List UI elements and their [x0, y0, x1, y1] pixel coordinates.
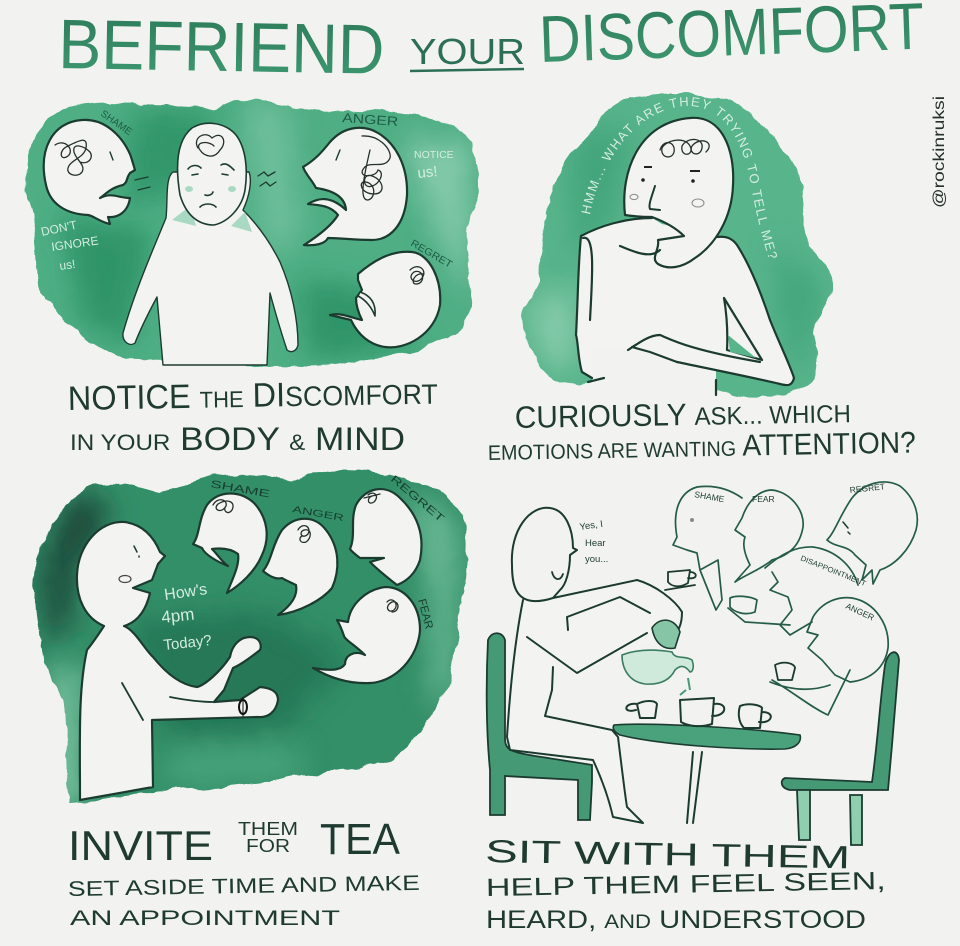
emotion bubble: shame: DON'T [40, 218, 79, 239]
emotion: disappointment: DISAPPOINTMENT [799, 554, 868, 588]
panel: invite them for tea [20, 460, 480, 810]
emotion: regret [827, 481, 917, 584]
emotion bubble: shame [193, 478, 271, 593]
emotion bubble: shame: IGNORE [50, 234, 99, 254]
teapot [622, 620, 693, 684]
panel: sit with them [487, 481, 917, 845]
emotion bubble: anger: NOTICE [414, 149, 454, 161]
credit handle: @rockinruksi [931, 96, 948, 208]
emotion bubble: regret [350, 473, 447, 585]
caption: invite them for tea: INVITE [68, 822, 213, 869]
person and watch: Today? [163, 632, 213, 654]
emotion bubble: shame: SHAME [98, 108, 134, 138]
emotion bubble: anger [303, 110, 454, 245]
caption: invite them for tea: FOR [246, 836, 290, 856]
caption: notice the discomfort: IN YOUR BODY & MIND [70, 421, 405, 457]
emotion bubble: regret [330, 238, 454, 347]
curved thought text: HMM... WHAT ARE THEY TRYING TO TELL ME? [581, 97, 777, 258]
left chair [487, 633, 592, 820]
emotion bubble: shame [40, 108, 135, 273]
emotion group: shame and fear: FEAR [752, 494, 775, 504]
caption: invite them for tea: THEM [238, 819, 298, 839]
emotion: anger: ANGER [844, 601, 876, 623]
pouring person: Hear [585, 538, 606, 549]
panel: curiously ask [521, 92, 834, 398]
watercolor wash 1 [24, 98, 479, 368]
watercolor wash 3 [20, 460, 480, 810]
caption: sit with them: HEARD, AND UNDERSTOOD [486, 906, 866, 934]
person and watch [77, 522, 278, 800]
pouring person [507, 508, 682, 823]
panel: notice the discomfort [24, 98, 479, 368]
caption: sit with them [485, 833, 886, 934]
emotion bubble: anger: ANGER [291, 504, 345, 524]
person and watch: How's [163, 581, 208, 604]
caption: sit with them: SIT WITH THEM [485, 833, 850, 875]
emotion bubble: anger: ANGER [342, 110, 399, 129]
person with hands on ears [123, 123, 298, 365]
emotion bubble: fear: FEAR [415, 598, 435, 630]
title: BEFRIEND [58, 5, 385, 89]
caption: curiously ask: EMOTIONS ARE WANTING ATTENTION? [488, 427, 916, 467]
emotion bubble: fear [313, 587, 435, 683]
caption: sit with them: HELP THEM FEEL SEEN, [486, 867, 886, 902]
caption: invite them for tea: TEA [320, 815, 401, 864]
emotion bubble: shame: SHAME [209, 478, 271, 500]
caption: curiously ask [488, 394, 916, 467]
emotion group: shame and fear: SHAME [694, 489, 725, 504]
emotion: regret: REGRET [849, 481, 885, 495]
caption: curiously ask: CURIOUSLY ASK... WHICH [515, 394, 851, 435]
emotion group: shame and fear [665, 486, 803, 610]
emotion bubble: anger [263, 504, 345, 615]
pouring person: you... [585, 554, 608, 565]
emotion bubble: anger: us! [417, 163, 438, 182]
emotion: anger [770, 598, 888, 715]
emotion bubble: regret: REGRET [408, 238, 454, 271]
person and watch: 4pm [160, 605, 195, 627]
caption: invite them for tea: AN APPOINTMENT [70, 907, 340, 930]
title [58, 0, 925, 89]
right chair [782, 652, 899, 845]
thinking person [576, 118, 794, 402]
emotion: disappointment [728, 547, 868, 635]
emotion bubble: regret: REGRET [388, 473, 447, 525]
watercolor wash 2 [521, 92, 834, 398]
caption: notice the discomfort [67, 374, 438, 457]
title: YOUR [410, 31, 525, 72]
caption: invite them for tea: SET ASIDE TIME AND MAKE [68, 872, 420, 901]
caption: notice the discomfort: NOTICE THE DISCOMFORT [67, 374, 438, 418]
emotion bubble: shame: us! [58, 257, 76, 273]
table and cups [613, 678, 800, 823]
pouring person: Yes, I [579, 519, 604, 533]
caption: invite them for tea [68, 815, 420, 930]
